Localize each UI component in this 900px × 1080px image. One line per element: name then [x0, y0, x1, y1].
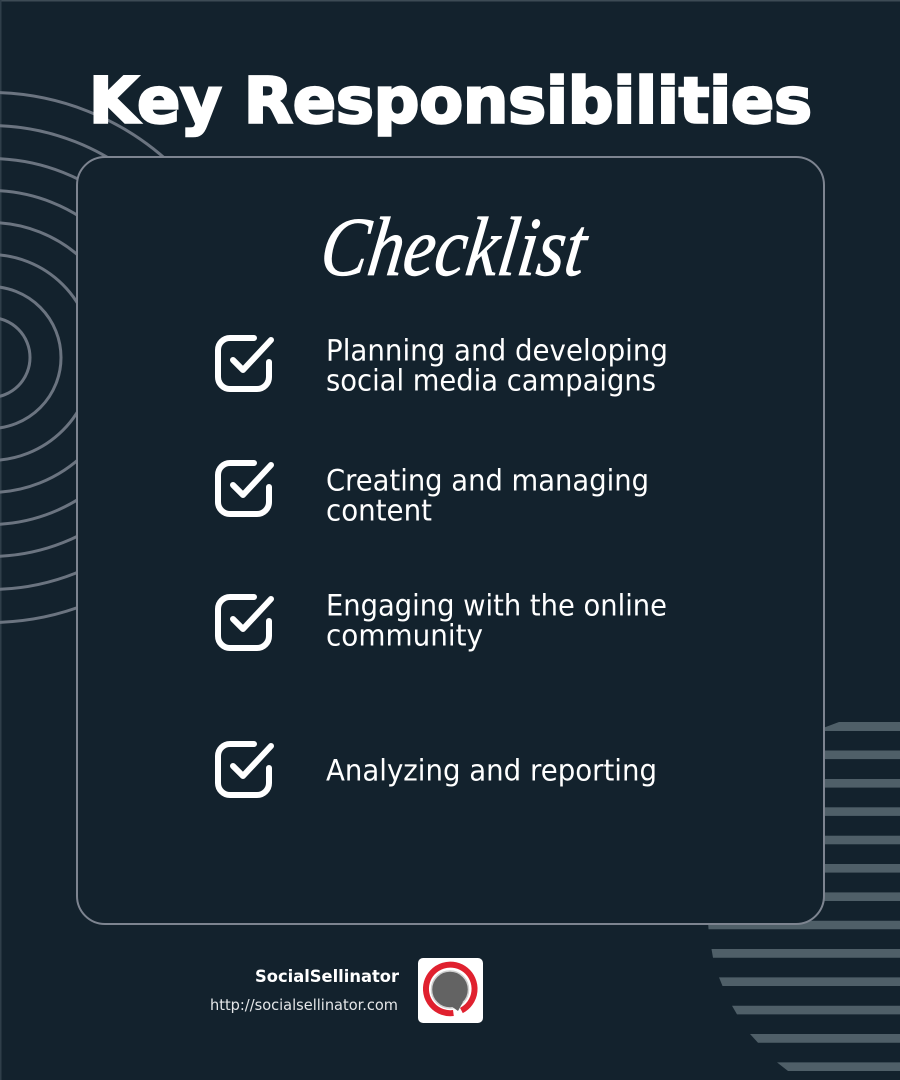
- concentric rings decoration: [0, 92, 255, 622]
- text: item 2: [326, 464, 649, 528]
- striped circle decoration: [708, 722, 900, 1071]
- text: item 3: [326, 588, 667, 652]
- footer brand name: SocialSellinator: [255, 967, 400, 986]
- icon: checkbox 4: [218, 744, 271, 795]
- icon: checkbox 1: [218, 338, 271, 389]
- text: item 3: Engaging with the online: [326, 588, 667, 622]
- text: item 3: community: [326, 618, 483, 652]
- footer url: http://socialsellinator.com: [210, 996, 398, 1014]
- text: item 4: Analyzing and reporting: [326, 754, 657, 788]
- icon: checkbox 3: [218, 597, 271, 648]
- panel heading: Checklist: Checklist: [315, 201, 594, 294]
- text: item 1: [326, 334, 668, 398]
- title: Key Responsibilities: [89, 64, 812, 138]
- icon: logo: [418, 958, 483, 1023]
- text: item 1: Planning and developing: [326, 334, 668, 368]
- text: item 2: Creating and managing: [326, 464, 649, 498]
- icon: checkbox 2: [218, 463, 271, 514]
- panel: checklist: [77, 157, 824, 924]
- text: item 1: social media campaigns: [326, 364, 656, 398]
- text: item 2: content: [326, 494, 432, 528]
